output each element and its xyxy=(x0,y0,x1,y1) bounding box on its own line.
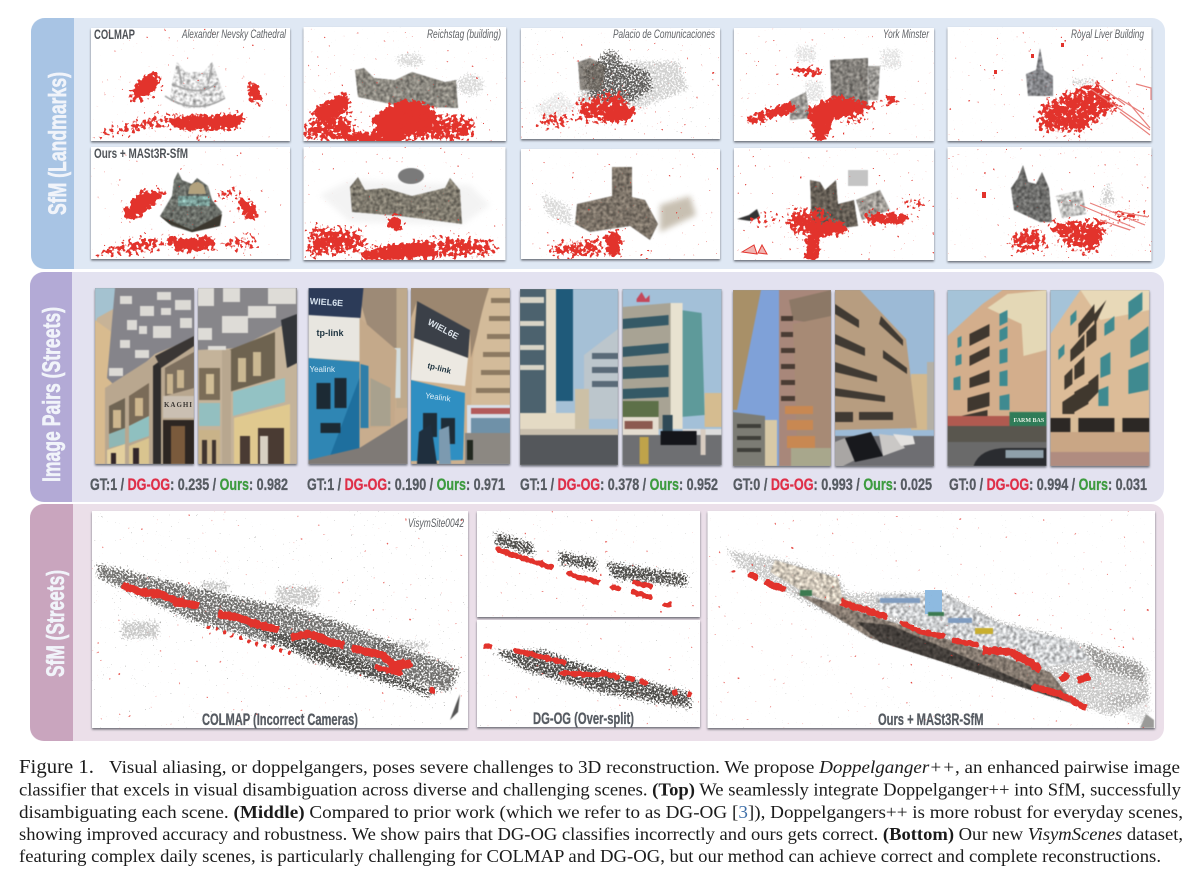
scene name: Alexander Nevsky Cathedral xyxy=(181,29,286,41)
figure caption text xyxy=(19,756,1183,866)
label: Ours + MASt3R-SfM: Ours + MASt3R-SfM xyxy=(94,145,188,161)
cameras: red frusta xyxy=(306,216,496,260)
caption: pair 1 scores: GT:1 / DG-OG: 0.235 / Ours: 0.982 xyxy=(90,475,288,494)
panel: Image Pairs (Streets) xyxy=(30,272,1164,502)
card: Ours + MASt3R-SfM street reconstruction xyxy=(708,511,1155,729)
card: COLMAP, Reichstag xyxy=(304,27,506,143)
scene name: Reichstag (building) xyxy=(427,29,501,41)
reconstruction: cathedral xyxy=(160,172,222,232)
cameras: red frusta xyxy=(94,190,258,258)
photo pair 2: tp-link and Yealink shop: Yealink xyxy=(310,365,336,374)
figure caption text: Figure 1. xyxy=(19,756,94,778)
reconstruction: York Minster xyxy=(737,170,890,232)
cameras: red frusta xyxy=(304,92,478,143)
card: COLMAP, Alexander Nevsky Cathedral xyxy=(91,26,290,141)
card: COLMAP, Royal Liver Building xyxy=(948,27,1152,141)
panel: SfM (Landmarks) xyxy=(31,18,1165,269)
card: DG-OG split part one xyxy=(477,511,700,617)
card: COLMAP, Palacio de Comunicaciones xyxy=(521,28,720,139)
photo pair 2: tp-link and Yealink shop: tp-link xyxy=(316,328,344,338)
caption: Ours + MASt3R-SfM: Ours + MASt3R-SfM xyxy=(878,710,984,729)
card: COLMAP street reconstruction xyxy=(92,511,468,729)
photo pair 2: tp-link and Yealink shop: Yealink xyxy=(425,391,452,404)
photo pair 5: beige apartment block xyxy=(948,290,1149,466)
reconstruction: dense street xyxy=(724,548,1154,728)
photo pair 2: tp-link and Yealink shop xyxy=(308,288,510,464)
point cloud: York Minster xyxy=(790,45,902,120)
photo pair 2: tp-link and Yealink shop: WIEL6E xyxy=(426,317,460,342)
reconstruction: Palacio xyxy=(540,167,696,240)
point cloud: scattered palace xyxy=(530,50,690,122)
card: COLMAP, York Minster xyxy=(734,28,934,141)
caption: pair 5 scores: GT:0 / DG-OG: 0.994 / Ours: 0.031 xyxy=(949,475,1147,494)
side label: Image Pairs (Streets): Image Pairs (Streets) xyxy=(38,307,66,482)
caption: pair 4 scores: GT:0 / DG-OG: 0.993 / Ours: 0.025 xyxy=(733,475,932,494)
cameras: red frusta xyxy=(982,195,1148,256)
scene name: VisymSite0042 xyxy=(408,518,464,530)
figure caption text: classifier that excels in visual disambiguation across diverse and challenging scenes. (Top) We seamlessly integrate Doppelganger++ into SfM, successfully xyxy=(19,780,1182,800)
caption: COLMAP (Incorrect Cameras): COLMAP (Incorrect Cameras) xyxy=(202,710,358,729)
side label: SfM (Landmarks): SfM (Landmarks) xyxy=(44,72,72,215)
reconstruction: Royal Liver xyxy=(1011,165,1116,222)
cameras: red frusta xyxy=(742,69,896,141)
side label: SfM (Streets): SfM (Streets) xyxy=(42,570,70,677)
card: Ours, Reichstag xyxy=(304,147,506,260)
card: Ours, Palacio de Comunicaciones xyxy=(521,149,720,259)
figure caption text: Visual aliasing, or doppelgangers, poses severe challenges to 3D reconstruction. We propose Doppelganger++ , an enhanced pairwise image xyxy=(109,757,1180,777)
photo pair 1: storefront with stacked balconies xyxy=(95,288,297,464)
card: DG-OG split part two xyxy=(477,620,700,728)
cameras: red frusta xyxy=(994,45,1151,135)
card: Ours, Alexander Nevsky Cathedral xyxy=(91,145,290,259)
photo pair 3: glass office buildings xyxy=(520,289,722,465)
caption: DG-OG (Over-split): DG-OG (Over-split) xyxy=(533,709,634,728)
cameras: red frusta xyxy=(535,90,636,128)
cameras: red frusta xyxy=(92,72,262,140)
side label: SfM (Streets) xyxy=(30,504,73,741)
side label: Image Pairs (Streets) xyxy=(30,272,72,502)
point cloud: pale cathedral xyxy=(165,62,225,108)
scene name: Palacio de Comunicaciones xyxy=(613,29,715,41)
caption: pair 2 scores: GT:1 / DG-OG: 0.190 / Ours: 0.971 xyxy=(307,475,505,494)
photo pair 5: beige apartment block: FARM BAS xyxy=(1014,418,1045,424)
point cloud: Reichstag xyxy=(355,52,485,108)
photo pair 4: tan towers and parking xyxy=(733,290,934,466)
figure caption text: showing improved accuracy and robustness. We show pairs that DG-OG classifies incorrectly and ours gets correct. (Bottom) Our new VisymScenes dataset, xyxy=(19,824,1183,845)
panel: SfM (Streets) xyxy=(30,504,1164,741)
point cloud: street scene xyxy=(96,562,462,720)
point cloud: upper fragment xyxy=(494,530,688,588)
photo pair 2: tp-link and Yealink shop: WIEL6E xyxy=(309,296,343,308)
cameras: red frusta xyxy=(545,232,650,258)
photo pair 1: storefront with stacked balconies: KAGHI xyxy=(164,401,192,409)
cameras: red segments xyxy=(484,646,692,695)
point cloud: Royal Liver Building xyxy=(1026,48,1096,96)
figure caption text: disambiguating each scene. (Middle) Compared to prior work (which we refer to as DG-OG [ 3]), Doppelgangers++ is more robust for everyday scenes, xyxy=(19,802,1183,823)
cameras: red trajectory xyxy=(732,570,1090,708)
scene name: Royal Liver Building xyxy=(1071,29,1144,41)
cameras: red frusta xyxy=(742,200,926,260)
cameras: red segments xyxy=(496,549,671,605)
figure caption text: featuring complex daily scenes, is particularly challenging for COLMAP and DG-OG, but our method can achieve correct and complete reconstructions. xyxy=(19,846,1161,866)
point cloud: lower fragment xyxy=(488,648,692,710)
label: COLMAP: COLMAP xyxy=(94,26,135,42)
photo pair 2: tp-link and Yealink shop: tp-link xyxy=(427,361,453,376)
caption: pair 3 scores: GT:1 / DG-OG: 0.378 / Ours: 0.952 xyxy=(520,475,718,494)
card: Ours, Royal Liver Building xyxy=(948,147,1152,261)
cameras: red trajectory xyxy=(122,585,432,693)
scene name: York Minster xyxy=(883,29,930,41)
card: Ours, York Minster xyxy=(734,148,934,260)
reconstruction: Reichstag xyxy=(320,168,490,225)
side label: SfM (Landmarks) xyxy=(31,18,74,269)
